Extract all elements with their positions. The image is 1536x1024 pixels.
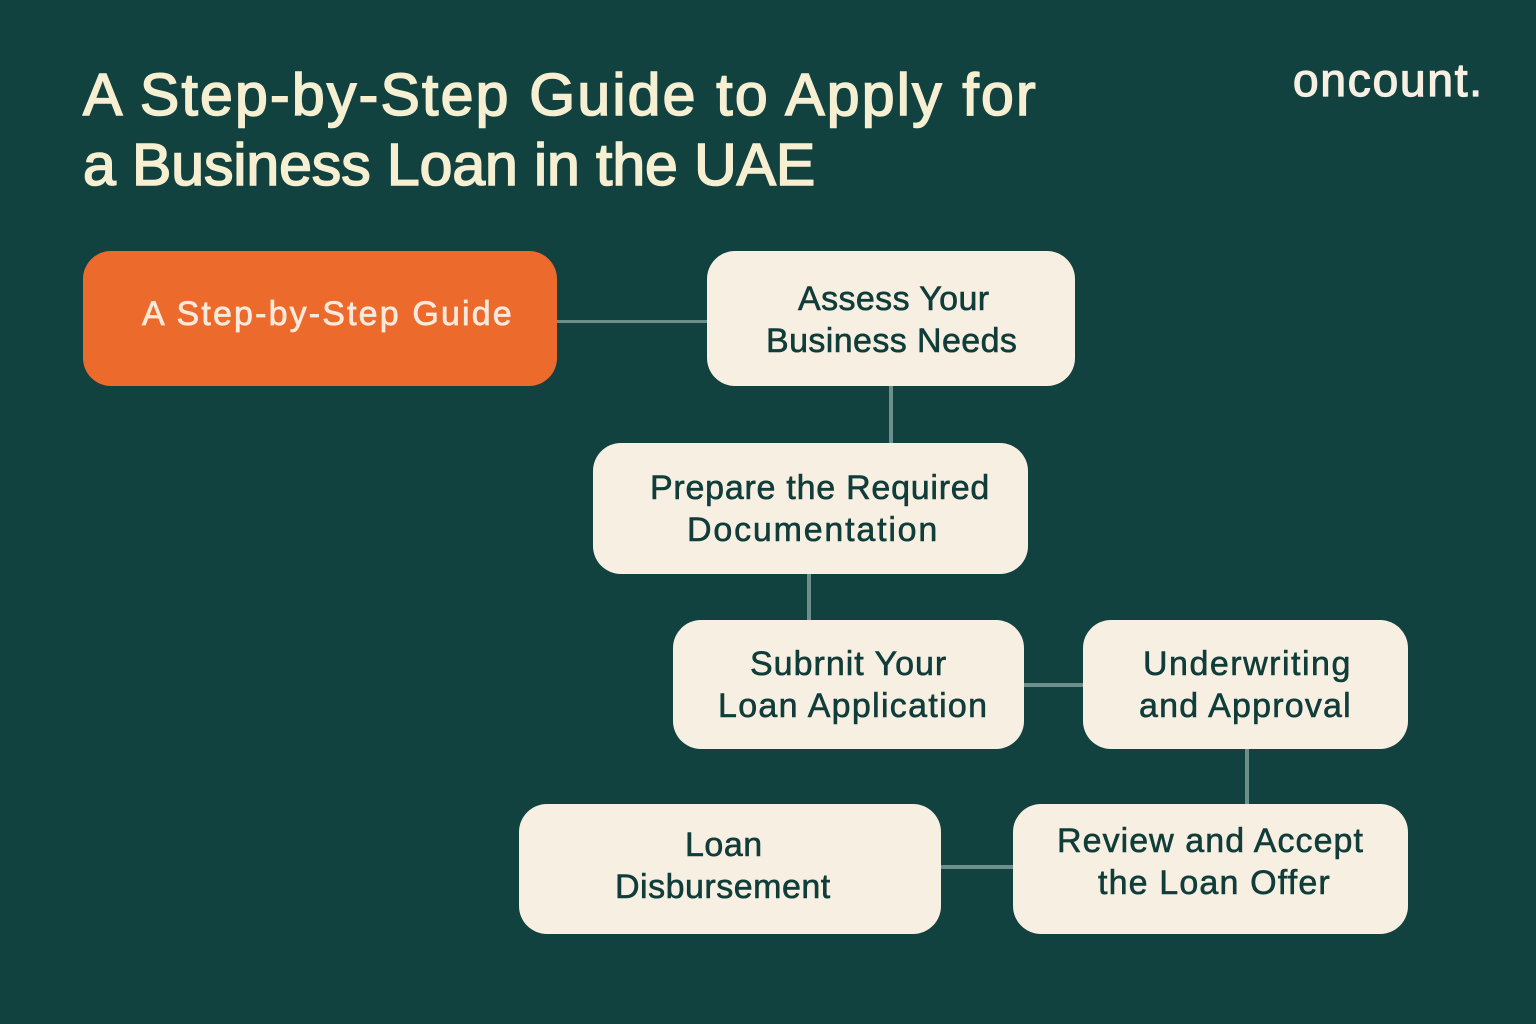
logo: oncount: oncount.: [1293, 54, 1484, 106]
step: Assess Your Business Needs: Business Needs: [766, 322, 1017, 360]
step: Loan Disbursement: Loan: [685, 826, 763, 864]
title: a Business Loan in the UAE: [83, 132, 815, 198]
connector: guide to assess: [556, 320, 708, 323]
step: Underwriting and Approval: and Approval: [1139, 687, 1352, 725]
connector: prepare to submit: [807, 573, 811, 621]
step: Review and Accept the Loan Offer: [1013, 804, 1408, 934]
connector: submit to underwriting: [1023, 683, 1084, 687]
start node: A Step-by-Step Guide: A Step-by-Step Guide: [142, 295, 514, 333]
step: Prepare the Required Documentation: [593, 443, 1028, 574]
connector: review to disbursement: [940, 865, 1014, 869]
step: Review and Accept the Loan Offer: Review and Accept: [1057, 822, 1364, 860]
step: Underwriting and Approval: Underwriting: [1143, 645, 1352, 683]
step: Assess Your Business Needs: Assess Your: [798, 280, 990, 318]
step: Submit Your Loan Application: [673, 620, 1024, 749]
step: Prepare the Required Documentation: Prepare the Required: [650, 469, 990, 507]
step: Loan Disbursement: [519, 804, 941, 934]
step: Underwriting and Approval: [1083, 620, 1408, 749]
connector: underwriting to review: [1245, 748, 1249, 805]
start node: A Step-by-Step Guide: [83, 251, 557, 386]
step: Loan Disbursement: Disbursement: [615, 868, 831, 906]
step: Submit Your Loan Application: Loan Application: [718, 687, 988, 725]
step: Submit Your Loan Application: Subrnit Your: [750, 645, 947, 683]
title: [82, 62, 1038, 198]
step: Prepare the Required Documentation: Documentation: [687, 511, 939, 549]
title: A Step-by-Step Guide to Apply for: [83, 62, 1038, 128]
step: Assess Your Business Needs: [707, 251, 1075, 386]
step: Review and Accept the Loan Offer: the Loan Offer: [1098, 864, 1331, 902]
connector: assess to prepare: [889, 386, 893, 443]
